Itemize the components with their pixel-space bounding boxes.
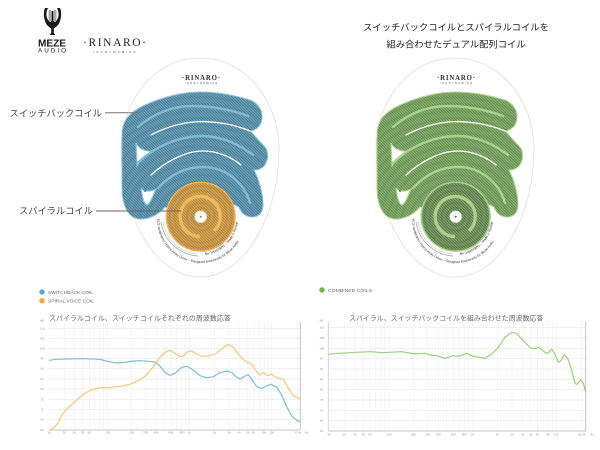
logo: small Rinaro: ·RINARO· bbox=[182, 75, 220, 82]
y axis labels: 80 bbox=[40, 387, 44, 391]
x axis labels: 30 bbox=[63, 431, 66, 435]
x axis labels: 20.0k bbox=[294, 431, 302, 435]
x axis labels: 5k bbox=[246, 431, 250, 435]
y axis labels: 85 bbox=[40, 377, 44, 381]
y axis labels: dB bbox=[320, 318, 323, 322]
y axis labels: 65 bbox=[40, 418, 44, 422]
x axis labels: 2k bbox=[213, 431, 216, 435]
chart title: right: スパイラル、スイッチバックコイルを組み合わせた周波数応答 bbox=[349, 314, 543, 322]
logo: small Rinaro: ·RINARO· bbox=[437, 75, 475, 82]
x axis labels: 60 bbox=[368, 432, 372, 436]
x axis labels: 8k bbox=[263, 431, 266, 435]
x axis labels: 400 bbox=[436, 432, 441, 436]
y axis labels: 90 bbox=[320, 367, 324, 371]
x axis labels: Hz bbox=[590, 432, 594, 436]
legend: left chart bbox=[39, 289, 94, 304]
legend: right chart: COMBINED COILS bbox=[328, 288, 372, 293]
x axis labels: 60 bbox=[88, 431, 91, 435]
label: spiral coil: スパイラルコイル bbox=[19, 206, 93, 216]
curve: switchback coil bbox=[49, 359, 300, 422]
x axis labels: 600 bbox=[168, 431, 173, 435]
x axis labels: 6k bbox=[252, 431, 255, 435]
driver caption ring: PCS Isodynamic Hybrid Array Driver – Designed Exclusively for Meze Audio bbox=[157, 219, 238, 264]
y axis labels: 110 bbox=[320, 326, 325, 330]
x axis labels: 800 bbox=[462, 432, 467, 436]
y axis labels: 95 bbox=[320, 357, 324, 361]
x axis labels: 100 bbox=[105, 431, 110, 435]
logo: small Rinaro: ISODYNAMICS bbox=[185, 82, 217, 85]
chart: right frequency response bbox=[319, 318, 594, 436]
driver caption ring: Bw 10Ω/20kHz – Made in Romania bbox=[204, 222, 238, 255]
driver outline bbox=[376, 58, 534, 277]
icon: lyre bbox=[44, 8, 61, 35]
y axis labels: 85 bbox=[320, 377, 324, 381]
heading: dual array coil: 組み合わせたデュアル配列コイル bbox=[386, 38, 526, 50]
x axis labels: 50 bbox=[81, 431, 85, 435]
x axis labels: 30 bbox=[343, 432, 346, 436]
panel: combined coils diagram bbox=[376, 58, 534, 278]
y axis labels: 60 bbox=[320, 429, 324, 433]
x axis labels: 200 bbox=[411, 432, 416, 436]
x axis labels: 400 bbox=[154, 431, 159, 435]
y axis labels: dB bbox=[40, 319, 44, 323]
y axis labels: 70 bbox=[40, 407, 44, 411]
y axis labels: 105 bbox=[40, 336, 45, 340]
curve: spiral voice coil bbox=[49, 344, 300, 430]
x axis labels: 4k bbox=[521, 432, 525, 436]
wordmark: MEZE: MEZE bbox=[38, 38, 66, 50]
y axis labels: 75 bbox=[320, 398, 324, 402]
y axis labels bbox=[40, 319, 45, 432]
x axis labels: 3k bbox=[227, 431, 231, 435]
x axis labels bbox=[48, 431, 309, 435]
logo: small Rinaro: ISODYNAMICS bbox=[440, 82, 472, 85]
y axis labels: 90 bbox=[40, 367, 44, 371]
label: switchback coil: スイッチバックコイル bbox=[10, 108, 102, 118]
curve: combined coils bbox=[328, 332, 586, 392]
y axis labels: 80 bbox=[320, 388, 324, 392]
x axis labels: Hz bbox=[305, 431, 309, 435]
x axis labels: 3k bbox=[510, 432, 514, 436]
x axis labels: 20 bbox=[327, 432, 331, 436]
logo: Rinaro Isodynamics: ·RINARO· bbox=[83, 37, 146, 49]
x axis labels: 5k bbox=[529, 432, 533, 436]
x axis labels: 200 bbox=[129, 431, 134, 435]
x axis labels: 800 bbox=[180, 431, 185, 435]
x axis labels: 10k bbox=[554, 432, 559, 436]
heading: dual array coil bbox=[363, 22, 549, 50]
x axis labels: 4k bbox=[238, 431, 241, 435]
driver outline bbox=[121, 58, 279, 277]
logo: Meze Audio bbox=[38, 8, 66, 54]
y axis labels: 75 bbox=[40, 397, 44, 401]
spiral voice coil bbox=[166, 182, 236, 252]
y axis labels: 70 bbox=[320, 408, 324, 412]
y axis labels: 95 bbox=[40, 357, 44, 361]
x axis labels: 1k bbox=[188, 431, 191, 435]
chart: left frequency response bbox=[40, 319, 309, 435]
y axis labels: 105 bbox=[319, 336, 325, 340]
x axis labels: 2k bbox=[496, 432, 499, 436]
x axis labels: 20 bbox=[48, 431, 51, 435]
y axis labels bbox=[319, 318, 325, 433]
driver caption ring: PCS Isodynamic Hybrid Array Driver – Designed Exclusively for Meze Audio bbox=[412, 219, 494, 264]
y axis labels: 110 bbox=[40, 326, 45, 330]
y axis labels: 65 bbox=[320, 419, 324, 423]
x axis labels: 40 bbox=[353, 432, 357, 436]
x axis labels: 40 bbox=[73, 431, 76, 435]
x axis labels bbox=[327, 432, 594, 436]
x axis labels: 6k bbox=[536, 432, 539, 436]
heading: dual array coil: スイッチバックコイルとスパイラルコイルを bbox=[363, 22, 549, 32]
combined coil bbox=[376, 92, 524, 252]
driver caption ring: Bw 10Ω/20kHz – Made in Romania bbox=[460, 222, 493, 255]
switchback coil bbox=[122, 92, 268, 220]
x axis labels: 50 bbox=[362, 432, 365, 436]
y axis labels: 100 bbox=[40, 346, 45, 350]
x axis labels: 100 bbox=[387, 432, 392, 436]
x axis labels: 1k bbox=[471, 432, 474, 436]
x axis labels: 8k bbox=[546, 432, 550, 436]
x axis labels: 600 bbox=[451, 432, 456, 436]
panel: separate coils diagram bbox=[120, 58, 280, 278]
y axis labels: 100 bbox=[319, 346, 325, 350]
legend: left chart: SPIRAL VOICE COIL bbox=[48, 298, 94, 304]
legend: left chart: SWITCHBACK COIL bbox=[48, 290, 93, 295]
y axis labels: 60 bbox=[40, 428, 44, 432]
x axis labels: 20.0k bbox=[578, 432, 586, 436]
logo: Rinaro Isodynamics: ISODYNAMICS bbox=[94, 50, 136, 54]
chart title: left: スパイラルコイル、スイッチコイルそれぞれの周波数応答 bbox=[49, 314, 231, 322]
x axis labels: 300 bbox=[425, 432, 430, 436]
x axis labels: 300 bbox=[143, 431, 148, 435]
x axis labels: 10k bbox=[269, 431, 275, 435]
wordmark: AUDIO: AUDIO bbox=[38, 48, 66, 54]
